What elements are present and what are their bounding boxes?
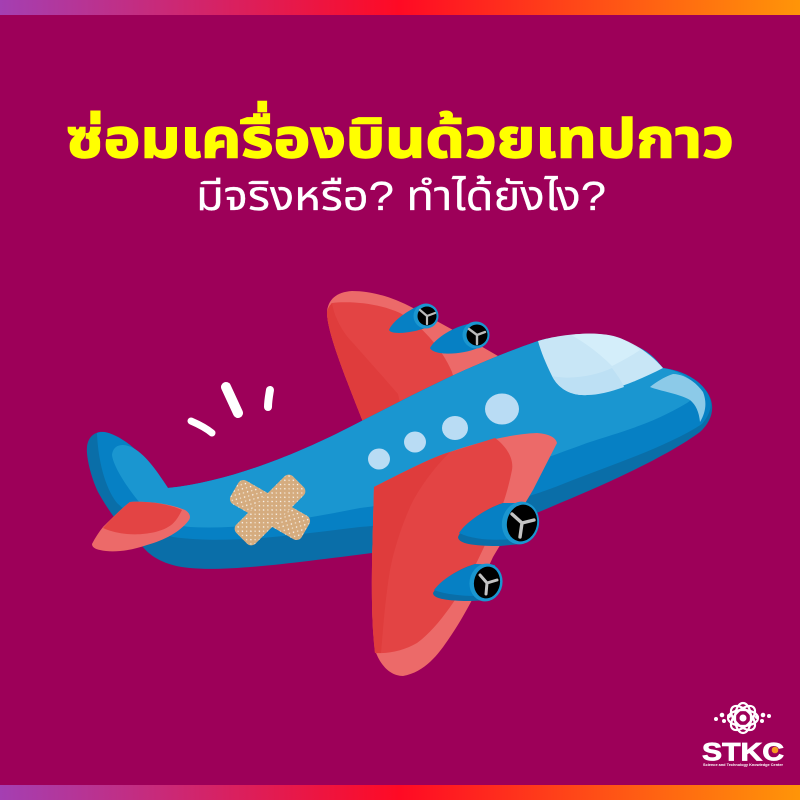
bottom gradient bar bbox=[0, 785, 800, 800]
title: ซ่อมเครื่องบินด้วยเทปกาว bbox=[66, 102, 734, 170]
airplane illustration bbox=[87, 291, 712, 676]
fuselage bbox=[87, 336, 712, 569]
near engine 1 bbox=[458, 498, 543, 548]
cabin windows bbox=[368, 394, 519, 470]
impact lines bbox=[191, 387, 270, 433]
subtitle: มีจริงหรือ? ทำได้ยังไง? bbox=[196, 173, 606, 219]
canopy bbox=[538, 334, 663, 395]
far wing bbox=[327, 291, 498, 445]
bandage cross bbox=[228, 472, 312, 548]
far engine 2 bbox=[430, 322, 490, 354]
near wing bbox=[372, 433, 557, 676]
logo orange dot bbox=[772, 747, 778, 753]
logo wordmark: STKC bbox=[702, 738, 784, 766]
logo tagline: Science and Technology Knowledge Center bbox=[703, 762, 783, 767]
near engine 2 bbox=[433, 561, 506, 604]
tail stabiliser bbox=[92, 502, 190, 551]
nose highlight bbox=[650, 374, 705, 422]
logo atom mark bbox=[714, 702, 771, 734]
top gradient bar bbox=[0, 0, 800, 15]
far engine 1 bbox=[389, 304, 438, 333]
STKC logo bbox=[702, 702, 784, 767]
